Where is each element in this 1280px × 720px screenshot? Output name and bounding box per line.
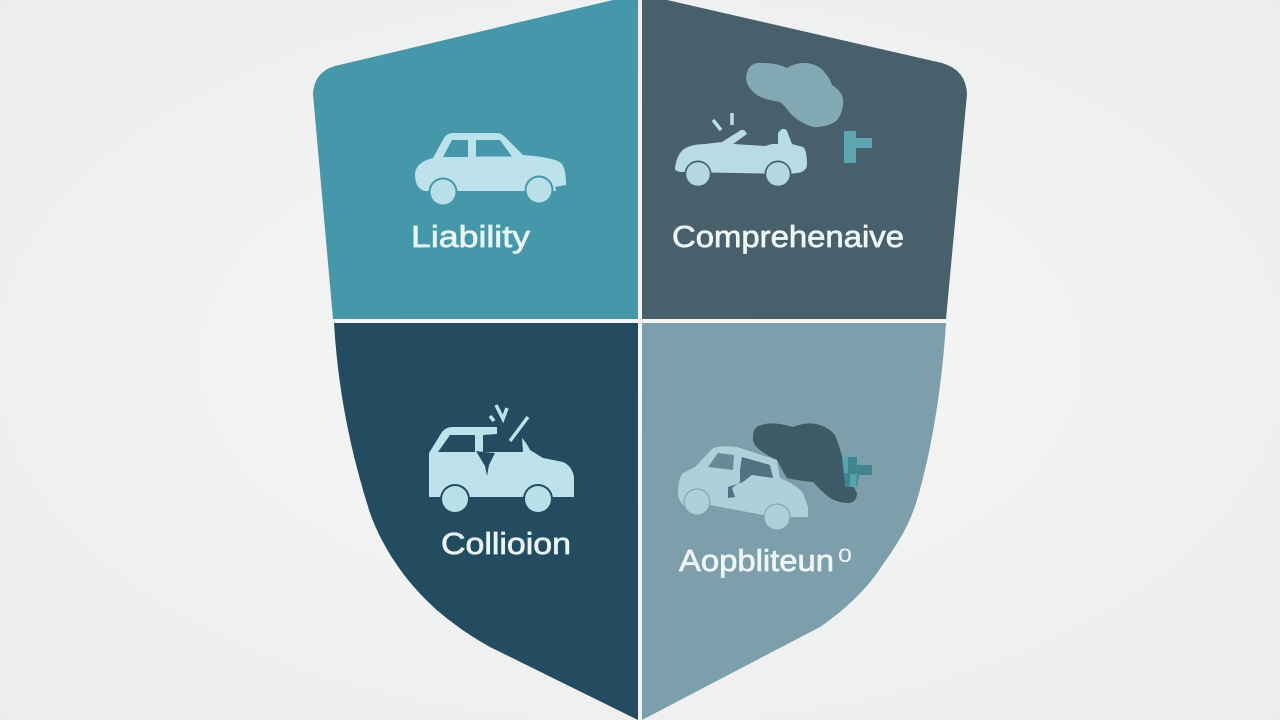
- label: collision: Collioion: [441, 526, 571, 561]
- panel: collision: [334, 323, 638, 720]
- icon: hydrant: [842, 457, 872, 487]
- icon: damaged convertible car: [675, 113, 807, 188]
- label: liability: Liability: [411, 219, 531, 254]
- label: small circle mark: o: [838, 540, 852, 568]
- icon: car: [415, 133, 566, 206]
- panel: comprehensive: [642, 0, 967, 319]
- icon: crashed car: [429, 405, 574, 514]
- icon: hydrant: [844, 131, 872, 163]
- icon: wrecked car: [678, 446, 808, 530]
- icon: smoke cloud: [753, 423, 857, 503]
- panel: liability: [313, 0, 638, 319]
- panel: application: [642, 323, 946, 720]
- label: comprehensive: Comprehenaive: [672, 219, 904, 254]
- label: application: Aopbliteun: [679, 543, 834, 578]
- icon: smoke cloud: [746, 63, 843, 127]
